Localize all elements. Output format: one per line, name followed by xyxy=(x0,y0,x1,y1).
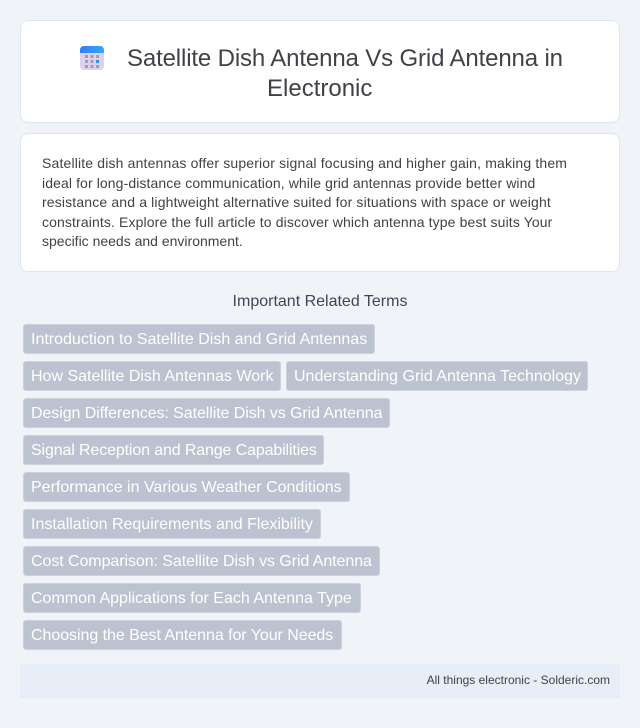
tag: choosing the best: Choosing the Best Antenna for Your Needs xyxy=(31,627,333,644)
panel: term tags xyxy=(23,324,588,650)
tag: cost comparison: Cost Comparison: Satellite Dish vs Grid Antenna xyxy=(31,553,372,570)
tag: how dishes work xyxy=(23,361,281,391)
tag: design differences: Design Differences: Satellite Dish vs Grid Antenna xyxy=(31,405,382,422)
summary text: ideal for long-distance communication, while grid antennas provide better wind xyxy=(42,175,535,191)
summary text: resistance and a lightweight alternative suited for situations with space or weight xyxy=(42,194,551,210)
tag: how dishes work: How Satellite Dish Antennas Work xyxy=(31,368,273,385)
panel: summary card xyxy=(20,133,620,272)
title xyxy=(127,45,563,102)
tag: signal reception: Signal Reception and Range Capabilities xyxy=(31,442,317,459)
heading: important related terms: Important Related Terms xyxy=(233,293,407,310)
panel: title card xyxy=(20,20,620,123)
title: Satellite Dish Antenna Vs Grid Antenna in xyxy=(127,45,563,72)
tag: choosing the best xyxy=(23,620,342,650)
tag: weather performance: Performance in Various Weather Conditions xyxy=(31,479,342,496)
tag: grid technology xyxy=(286,361,588,391)
tag: cost comparison xyxy=(23,546,380,576)
summary text: specific needs and environment. xyxy=(42,233,243,249)
summary text xyxy=(42,155,567,249)
footer xyxy=(20,664,620,698)
tag: introduction: Introduction to Satellite Dish and Grid Antennas xyxy=(31,331,367,348)
summary text: Satellite dish antennas offer superior signal focusing and higher gain, making them xyxy=(42,155,567,171)
tag: weather performance xyxy=(23,472,350,502)
tag: common applications: Common Applications for Each Antenna Type xyxy=(31,590,352,607)
footer text: All things electronic - Solderic.com xyxy=(427,673,610,687)
tag: installation: Installation Requirements and Flexibility xyxy=(31,516,313,533)
tag: introduction xyxy=(23,324,375,354)
tag: common applications xyxy=(23,583,361,613)
tag: installation xyxy=(23,509,321,539)
title: Electronic xyxy=(267,74,372,102)
icon: calendar xyxy=(80,46,104,70)
tag: grid technology: Understanding Grid Antenna Technology xyxy=(294,368,581,385)
summary text: constraints. Explore the full article to discover which antenna type best suits Your xyxy=(42,214,552,230)
tag: signal reception xyxy=(23,435,324,465)
tag: design differences xyxy=(23,398,390,428)
